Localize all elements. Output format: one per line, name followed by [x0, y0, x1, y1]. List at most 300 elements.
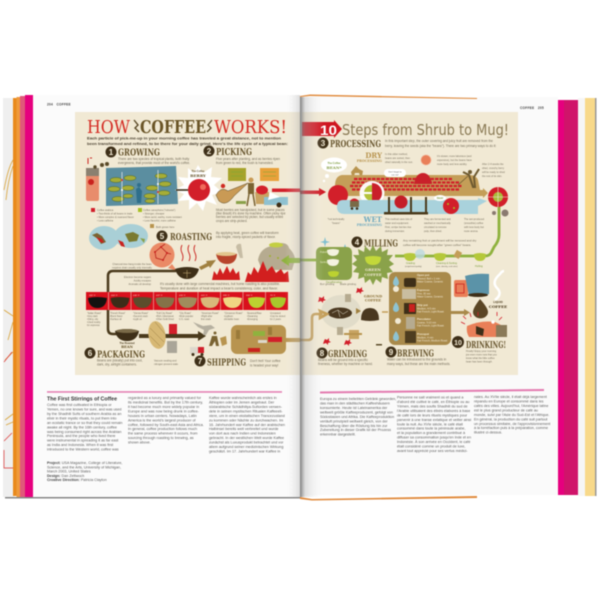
- step 1 growing: [106, 146, 190, 165]
- mug: [454, 271, 504, 300]
- page header right: COFFEE 205: [520, 106, 544, 110]
- arrow to roaster: [199, 260, 216, 270]
- legend coffee types: • More complex & nuanced flavor: [97, 216, 134, 219]
- intro text: [87, 136, 288, 146]
- german column two: Beschaffung über die Röstung bis hin zur: [320, 424, 388, 428]
- project credits: Design: Dan Zettwoch: [47, 474, 84, 478]
- english column one: an ecstatic trance or so that they could remain: [47, 421, 122, 425]
- french column one: toute la nuit. Au XVIe siècle, le café était: [397, 422, 463, 426]
- step 5 roasting: By applying heat, green coffee will transform: [216, 231, 279, 235]
- coffee sack: [146, 320, 168, 350]
- roast level labels: •Shiny, oily: [87, 319, 99, 321]
- french column one: et la population a grandement contribué à: [397, 431, 466, 435]
- french column one: Indonésie. À son arrivée en Occident, le café: [397, 440, 470, 444]
- sun me cloud: sun me!: [391, 174, 399, 176]
- red cup: [169, 324, 177, 334]
- french column two: cafés des villes. Aujourd'hui, l'Amérique latine: [474, 404, 548, 408]
- wet notes: [328, 215, 485, 233]
- brewing box: Fair French, Medium Roast: [417, 340, 448, 342]
- step 5 roasting: ROASTING: [170, 233, 212, 243]
- roast level strip: 356° F: [246, 295, 253, 297]
- legend coffee types: • Less flavorful, more caffeine: [143, 220, 176, 222]
- roast level labels: first crack: [201, 318, 212, 321]
- french column two: [474, 395, 550, 435]
- green pipe left: [300, 259, 320, 261]
- roast level strip: 464° F: [111, 295, 118, 297]
- legend coffee types: Coffee arabica: [97, 209, 114, 212]
- roast level labels: for 2 years: [270, 318, 282, 321]
- intro text: Each particle of pick-me-up in your morning coffee has traveled a great distance, not to mention: [87, 136, 282, 140]
- project credits: Project: USA Magazine, College of Literature,: [47, 461, 122, 465]
- milling cups: Grading: [406, 262, 416, 265]
- roast level strip: 446° F: [133, 295, 140, 297]
- brewing box: Water Coarse, Ceramic: [417, 280, 444, 284]
- berry wheel and green pipe: [395, 187, 508, 256]
- delivery truck: [190, 347, 204, 356]
- step 3 processing: 3: [321, 139, 326, 148]
- english column one: as India and Indonesia. When it was first: [47, 443, 113, 447]
- german column one: von dort aus nach Indien und Indonesien: [209, 432, 276, 436]
- red bean in tank: [394, 196, 408, 208]
- step 7 shipping: [194, 356, 281, 368]
- roast level strip: 395° F: [223, 295, 230, 297]
- english column two: sourcing through roasting to brewing, as: [128, 436, 194, 440]
- french column two: répandu en Europe et consommé dans les: [474, 400, 544, 404]
- english column two: regarded as a luxury and primarily valued for: [128, 396, 202, 400]
- coffee bean cloud: The Coffee: [328, 162, 341, 165]
- roast level strip: 482° F: [89, 295, 96, 297]
- hand and picker: [216, 178, 300, 206]
- german column two: erkennbar dargestellt.: [320, 433, 356, 437]
- intro text: been transformed and refined, to be there for your daily grind. Here's the life cycle of a typical bean:: [87, 141, 288, 146]
- roast level strip: [86, 292, 288, 310]
- step 4 milling: Any remaining fruit or parchment will be removed and dry: [403, 238, 477, 242]
- step 9 brewing: 9: [389, 348, 394, 357]
- english column one: were instrumental in spreading it as far east: [47, 439, 118, 443]
- ten steps banner: 10: [320, 122, 337, 138]
- english column two: [128, 396, 204, 445]
- poster right: [300, 112, 518, 375]
- coffee berry starburst: [175, 165, 222, 211]
- ground coffee bean: GROUND: [364, 294, 382, 298]
- english column two: In general, coffee production follows much: [128, 427, 197, 431]
- legend coffee types: Coffee canephora ("robusta"): [143, 209, 175, 212]
- shipping world panel: [231, 325, 300, 354]
- roast level labels: •Lightest: [224, 315, 233, 318]
- pink rule right: [320, 389, 544, 394]
- roast level labels: drinkable bean: [224, 318, 240, 321]
- roast level labels: •Can be stored: [270, 315, 286, 318]
- coffee bean cloud: [321, 158, 347, 182]
- milling box: Decaffeination: [326, 281, 343, 284]
- roasting notes: Electron become sugars: [124, 276, 152, 279]
- green coffee starburst: [352, 245, 394, 285]
- step 6 packaging: 6: [88, 349, 93, 358]
- roast level labels: •Used mostly: [87, 321, 101, 324]
- project credits: March 2003, United States: [47, 470, 91, 474]
- english column two: America is the world's largest producer of: [128, 418, 196, 422]
- roasting notes: It's usually done with large commercial machines, but home roasting is also possible.: [160, 282, 280, 286]
- dry text: dried naturally in the sun.: [385, 161, 413, 164]
- step 1 growing: 1: [109, 148, 114, 157]
- green coffee starburst: COFFEE: [364, 272, 382, 277]
- english column two: Europe and was now being drunk in coffee-: [128, 409, 200, 413]
- step 4 milling: [352, 236, 477, 250]
- dry text: It's slower, more laborious (and: [437, 155, 472, 158]
- step 8 grinding: [316, 348, 373, 366]
- step 3 processing: In this important step, the outer covering and juicy fruit are removed from the: [385, 139, 493, 143]
- liquid coffee drop: COFFEE: [489, 304, 507, 309]
- dry processing band: [335, 175, 488, 198]
- world map: [89, 224, 148, 250]
- wet processing band: [337, 197, 487, 214]
- wet berry with bubble: [434, 195, 459, 214]
- roast level labels: for espresso: [87, 324, 100, 327]
- english column one: Peninsula, and the people who lived there: [47, 434, 115, 438]
- dry text: In this older method,: [385, 153, 408, 156]
- wet notes: with less body but: [464, 226, 484, 229]
- roast level labels: [87, 312, 286, 327]
- bottom book shadow: [5, 497, 300, 498]
- coffee berry starburst: BERRY: [190, 173, 206, 178]
- dry text: will be ready to shed: [482, 171, 505, 174]
- dry text: After 2-4 weeks the: [482, 163, 504, 166]
- german column one: geschätzt. Im 17. Jahrhundert war Kaffee in: [209, 450, 280, 454]
- right page: [300, 97, 558, 495]
- german column one: xiere, um in einen ekstatischen Trancezustand: [209, 414, 285, 418]
- tan pipe to grinder: [300, 311, 327, 340]
- project credits: [47, 461, 122, 482]
- project credits: Science, and the Arts, University of Michigan,: [47, 465, 121, 469]
- french column one: avant tout apprécié pour ses vertus médici-: [397, 449, 468, 453]
- picking paragraph: crops are strip-picked.: [216, 219, 247, 223]
- step 2 picking: PICKING: [216, 148, 252, 158]
- roast level labels: •Most popular: [179, 315, 193, 318]
- brewing arrow: [451, 309, 470, 316]
- spine shadow left: [285, 95, 300, 497]
- step 6 packaging: PACKAGING: [97, 350, 145, 360]
- legend coffee types: • More acrid, earthy, more resistant: [143, 216, 182, 219]
- ground coffee bean: COFFEE: [365, 298, 381, 302]
- wet notes: washed or mechanically: [424, 222, 451, 225]
- drum roaster with flames: [212, 244, 243, 280]
- legend coffee types: [91, 208, 182, 229]
- roasting notes: Temperature and duration of heat impact a bean's consistency, color, and flavor.: [160, 286, 278, 290]
- step 8 grinding: Beans will be ground into a specific: [318, 358, 368, 362]
- coffee plants on blue ground: [106, 166, 178, 206]
- picking paragraph: berries are selected by picker, but usually entire: [216, 215, 284, 219]
- step 6 packaging: Beans are (ideally) put into cool,: [97, 358, 143, 362]
- brewing box: Presspot: [417, 332, 429, 336]
- german column one: südarabische Schädhiliya-Sufiorden verwen-: [209, 405, 283, 409]
- step 6 packaging: Vacuum sealing and: [154, 360, 177, 362]
- brewing box: Coarse, 5-10 min: [417, 322, 437, 324]
- steam lines: [181, 245, 196, 261]
- step 6 packaging: [84, 348, 179, 366]
- packaging arrow: [139, 331, 206, 341]
- brewing box: Fine, 30 sec: [417, 292, 431, 296]
- roast level labels: "American Roast": [201, 312, 219, 315]
- french column two: nales. Au XVIIe siècle, il était déjà largement: [474, 395, 547, 399]
- roast level labels: •Second crack: [133, 315, 149, 318]
- roasting path: [108, 271, 176, 334]
- roast level labels: "City Roast": [179, 312, 191, 315]
- roast level labels: •Surface oil: [110, 318, 122, 321]
- dome bean: [414, 173, 432, 184]
- dry processing label: PROCESSING: [357, 159, 382, 163]
- ten steps banner: Steps from Shrub to Mug!: [342, 121, 509, 139]
- french column two: est le plus grand producteur de café au: [474, 408, 538, 412]
- german column one: [209, 396, 285, 454]
- french column one: d'abord été cultivé le café, en Éthiopie ou au: [397, 399, 469, 404]
- english column one: [47, 403, 122, 452]
- airplane: [193, 322, 215, 335]
- blue sparkles: [320, 237, 349, 252]
- step 3 processing: berry, leaving the seeds (aka the "beans"). There are two primary ways to do it:: [385, 144, 496, 148]
- roasting notes: requires drain usually only internally: [112, 266, 153, 270]
- milling cups: [404, 249, 486, 268]
- wet notes: water and equipment.: [385, 222, 409, 225]
- wet notes: WET: [363, 215, 383, 224]
- coffee bean cloud: BEAN*: [326, 165, 342, 170]
- step 5 roasting: 5: [160, 232, 165, 241]
- milling cups: Cleaning & Sorting: [436, 262, 457, 265]
- french column two: monde, suivi par l'Asie du Sud-Est et l'Afrique.: [474, 413, 549, 417]
- main title: [87, 117, 287, 138]
- green arrow to roaster: [281, 255, 300, 266]
- industrial roaster with flames: [245, 242, 295, 282]
- step 9 brewing: BREWING: [397, 350, 434, 360]
- wet notes: pulp, then dried.: [424, 230, 442, 233]
- roast level labels: "Full City Roast": [156, 312, 173, 315]
- roast level labels: •Steaming: [247, 315, 258, 318]
- french column two: illustré ci-dessus.: [474, 431, 502, 435]
- coffee berry starburst: The Coffee: [192, 170, 205, 173]
- ten steps banner: [302, 120, 509, 139]
- step 10 drinking: [452, 336, 506, 364]
- hand grinder: [344, 330, 382, 346]
- grinding labels: Blade grinding: [340, 283, 357, 286]
- brewing box: Fair French, Light Roast: [417, 324, 444, 328]
- liquid coffee drop: [473, 299, 507, 318]
- ground coffee bean: [356, 294, 388, 321]
- french column two: En général, la production du café suit partout: [474, 417, 547, 421]
- german column one: zu kommen oder Nächte zu durchwachen. Im: [209, 418, 283, 422]
- step 10 drinking: bean has been through.: [466, 360, 493, 364]
- dry text: expensive), but the beans have: [437, 159, 472, 162]
- dry text: the rest of its skin.: [482, 175, 502, 178]
- roast level labels: Unroasted: [270, 312, 281, 315]
- english column one: introduced to the Western world, coffee was: [47, 448, 119, 452]
- roast level labels: Steamed/Raw: [247, 312, 262, 315]
- english column two: it had become much more widely popular in: [128, 405, 199, 409]
- english column one: Yemen, no one knows for sure, and was used: [47, 408, 121, 412]
- text section heading: The First Stirrings of Coffee: [47, 396, 117, 402]
- dry processing label: [357, 151, 383, 163]
- legend coffee types: Both grown here: [156, 226, 175, 229]
- french column one: [397, 396, 471, 453]
- step 7 shipping: 7: [198, 357, 203, 366]
- step 10 drinking: DRINKING!: [466, 341, 506, 351]
- rake worker: [458, 169, 479, 187]
- roasted bean: The Roasted: [119, 342, 135, 345]
- roast level strip: 437° F: [156, 295, 163, 297]
- milling cups: (origin/size/quality): [405, 265, 422, 268]
- step 9 brewing: [386, 346, 451, 366]
- roast level strip: 401° F: [201, 295, 208, 297]
- roast level labels: "French Roast": [110, 312, 126, 315]
- step 10 drinking: 10: [454, 340, 462, 347]
- german column one: Halbinsel bereits weit verbreitet und wurde: [209, 427, 278, 431]
- french column one: parvenir à une transe extatique et veiller ainsi: [397, 418, 471, 422]
- brewing box: Medium, 4 min: [417, 336, 434, 340]
- step 6 packaging: dark, dry, airtight containers.: [97, 362, 137, 366]
- roasted bean: [115, 329, 139, 349]
- step 5 roasting: into fragile, nicely-spiced packets of flavor.: [216, 235, 276, 239]
- brewing box: [389, 272, 451, 345]
- german column two: Zubereitung in dieser Grafik ist der Prozess: [320, 428, 391, 432]
- step 8 grinding: GRINDING: [328, 350, 367, 360]
- brewing box: Water Coarse, Ceramic: [417, 296, 444, 298]
- page header left: 204 COFFEE: [47, 102, 71, 106]
- sun icon: [421, 155, 431, 165]
- grey bag: [167, 341, 177, 353]
- french column one: était considéré comme un produit de luxe,: [397, 444, 465, 448]
- german column two: weltweit größte Kaffeeproduzent, gefolgt von: [320, 410, 393, 414]
- german column one: allem aufgrund seiner medizinischen Wirkung: [209, 445, 283, 449]
- step 3 processing: [318, 138, 496, 150]
- step 2 picking: 2: [207, 147, 212, 156]
- french column one: l'Arabie utilisaient des élixirs élaborés à base: [397, 409, 470, 413]
- step 2 picking: from green to red, the bush is harvested.: [216, 161, 274, 165]
- german column two: Europa zu einem beliebten Getränk geworden,: [320, 397, 396, 401]
- step 3 processing: PROCESSING: [330, 140, 381, 150]
- milling box: Polishing: [320, 251, 331, 254]
- german column two: [320, 397, 396, 437]
- french column one: Yémen, mais des soufis Shadhili du sud de: [397, 404, 468, 408]
- dry text: beans are sorted, then: [385, 157, 411, 160]
- roast level labels: •Rich, bittersweet: [156, 315, 174, 318]
- english column two: coffee, followed by South-east Asia and Africa.: [128, 423, 204, 427]
- step 6 packaging: nitrogen prevent stale: [154, 363, 179, 366]
- orange bottom edge: [300, 496, 477, 500]
- roast level labels: U.S. roast: [179, 318, 190, 321]
- english column one: was being consumed right across the Arabian: [47, 430, 121, 434]
- brewing box: Percolator: [417, 317, 432, 321]
- green coffee starburst: GREEN: [365, 267, 381, 272]
- roasted bean: BEAN: [121, 345, 134, 349]
- milling box: Sorting: [320, 261, 329, 264]
- brewing box: Espresso: [417, 288, 430, 292]
- poster left: [75, 112, 300, 375]
- roasting bowl dark: [175, 267, 199, 279]
- german column two: verläuft prinzipiell weltweit gleich, von der: [320, 419, 388, 423]
- picking paragraph: Most berries are handpicked, but in some places: [216, 208, 285, 212]
- step 8 grinding: fineness, whether by machine or hand.: [318, 362, 373, 366]
- wet notes: First, unripe berries rise: [385, 226, 412, 229]
- step 1 growing: GROWING: [118, 148, 160, 158]
- step 9 brewing: Water can be introduced to the grounds in: [387, 358, 446, 362]
- shipping worker: [209, 332, 227, 346]
- step 10 drinking: know what the little coffee: [466, 357, 495, 360]
- pink rule left: [47, 391, 282, 393]
- roast level labels: •Right after: [201, 315, 213, 318]
- harvest truck: [264, 192, 288, 208]
- wet notes: more aroma.: [464, 230, 478, 233]
- german column one: Kaffee wurde wahrscheinlich als erstes in: [209, 396, 277, 400]
- step 10 drinking: joe even more now that you: [465, 354, 497, 356]
- legend coffee types: • Stronger, cheaper: [143, 212, 165, 216]
- milling cups: (size, density, and color): [436, 265, 458, 268]
- german column two: konsumierte. Heute ist Lateinamerika der: [320, 406, 388, 410]
- step 7 shipping: Don't fret! Your coffee: [250, 359, 281, 363]
- french column two: à la torréfaction puis à la préparation, comme: [474, 426, 548, 430]
- step 10 drinking: Finally! Enjoy your morning: [466, 350, 497, 353]
- french column one: de café lors de leurs rituels mystiques pour: [397, 413, 468, 417]
- french column one: diffuser sa consommation jusqu'en Inde et en: [397, 436, 471, 440]
- wet notes: They are fermented and: [424, 218, 451, 221]
- wet notes: *not technically: [328, 218, 345, 221]
- english column two: the same process wherever it occurs, from: [128, 432, 197, 436]
- milling box: [316, 247, 352, 284]
- english column one: elixir in their mystic rituals, to put them into: [47, 416, 116, 420]
- step 2 picking: [204, 146, 280, 165]
- wet notes: during immersion.: [385, 230, 405, 233]
- brewing box: Filtered: Boil + 1 min: [417, 278, 440, 280]
- german column one: gebracht. In der westlichen Welt wurde Kaffee: [209, 436, 284, 440]
- project credits: Creative Direction: Patricia Clayton: [47, 478, 107, 482]
- step 7 shipping: SHIPPING: [207, 358, 246, 368]
- german column two: Südostasien und Afrika. Die Kaffeeproduktion: [320, 415, 394, 419]
- german column one: 16. Jahrhundert war Kaffee auf der arabischen: [209, 423, 285, 427]
- french column one: consommé dans toute la péninsule arabe,: [397, 427, 465, 431]
- french column one: Personne ne sait vraiment où et quand a: [397, 396, 464, 400]
- dry text: [385, 153, 505, 178]
- english column one: by the Shadhili Sufis of southern Arabia as an: [47, 412, 121, 416]
- roasting notes: Charcoal-tree-hang inside the bean: [112, 263, 152, 266]
- main title: HOW: [87, 117, 130, 138]
- step 2 picking: Five years after planting, and as berries ripen: [216, 157, 280, 161]
- step 1 growing: There are two species of tropical plants, both fruity: [118, 157, 190, 161]
- mine cart: [350, 198, 359, 210]
- dry text: more body and less acidity.: [437, 163, 467, 166]
- step 4 milling: coffee will become sought-after "green coffee" beans.: [403, 243, 472, 247]
- wet notes: The wet-produced: [464, 218, 485, 221]
- picking paragraph: (like Brazil) it's done by machine. Often picky ripe: [216, 212, 286, 216]
- red arrow to big berry: [300, 188, 326, 196]
- chemistry bubble: [150, 242, 177, 271]
- english column two: its medicinal benefits. But by the 17th century,: [128, 400, 203, 404]
- sun me cloud: [384, 169, 406, 177]
- brewing box: Open pot: [417, 273, 429, 277]
- german column two: das man in den städtischen Kaffeehäusern: [320, 402, 390, 406]
- wet berry with bubble: Stick!: [437, 197, 443, 200]
- orange top edge: [300, 94, 477, 99]
- step 5 roasting: [156, 230, 279, 243]
- roast level labels: •Emerging: [247, 318, 258, 321]
- roast level strip: 75° F: [270, 295, 276, 297]
- drying worker: [351, 166, 363, 176]
- roast level strip: 426° F: [179, 295, 186, 297]
- grinder burst: [318, 287, 364, 346]
- roasting notes: Aromatic oil develop: [128, 283, 152, 286]
- wet notes: "beans": [332, 222, 340, 225]
- sun me cloud: Don't forget to: [388, 170, 402, 174]
- picking paragraph: [216, 208, 286, 223]
- dry processing label: DRY: [365, 151, 383, 160]
- book page edges left: [3, 95, 33, 498]
- face icon with dots: [86, 158, 109, 201]
